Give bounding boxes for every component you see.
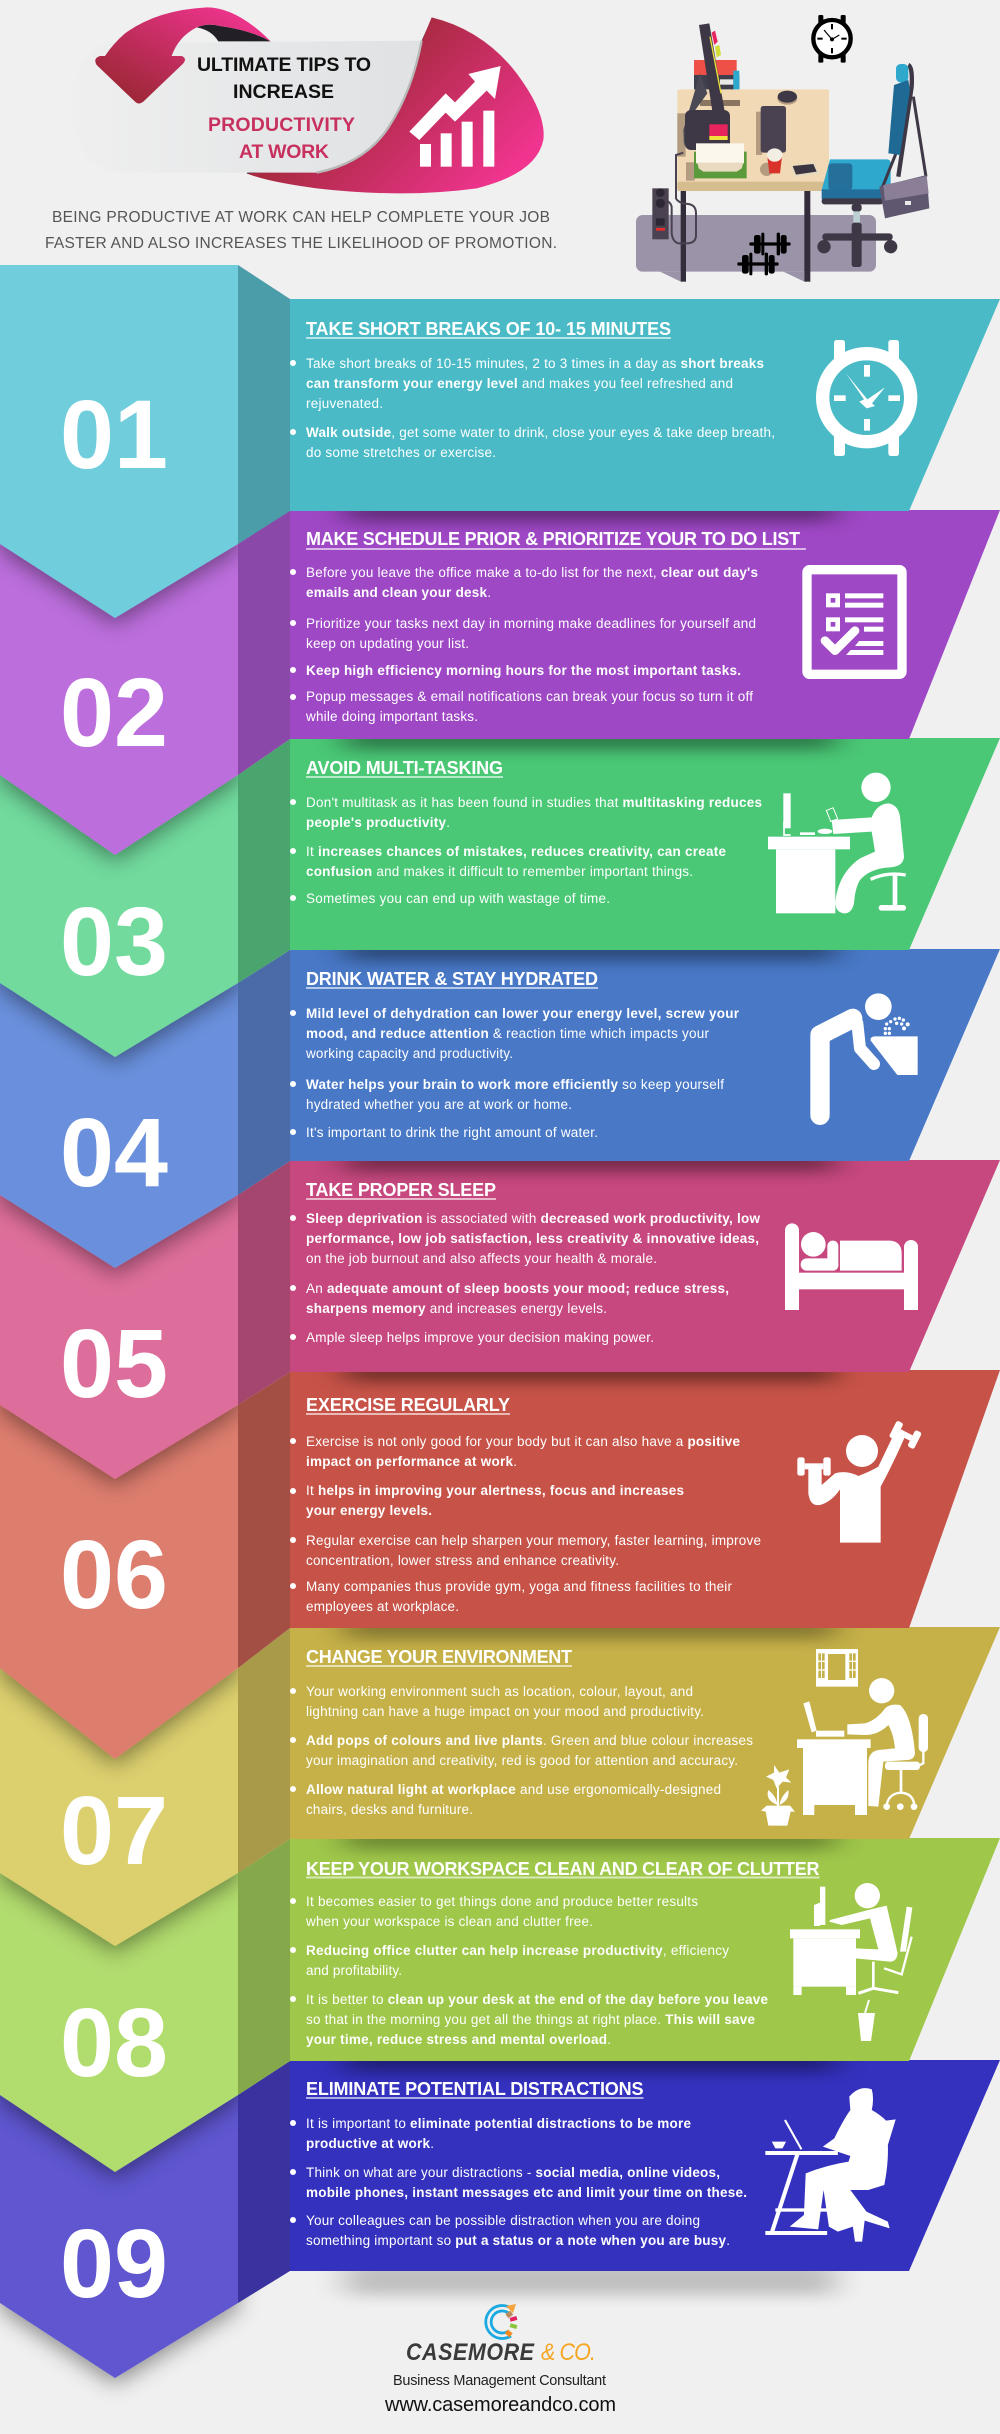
company logo and contact bbox=[384, 2304, 616, 2416]
title text: ULTIMATE TIPS TO bbox=[197, 54, 371, 76]
numbered chevrons bbox=[0, 265, 238, 2378]
text block: Take short breaks of 10-15 minutes, 2 to 3 times in a day as short breaks bbox=[306, 356, 764, 371]
text block: Don't multitask as it has been found in studies that multitasking reduces bbox=[306, 795, 762, 810]
chevron 02: 02 bbox=[60, 658, 168, 767]
text block: on the job burnout and also affects your health & morale. bbox=[306, 1251, 657, 1266]
chevron 09 bbox=[0, 2085, 238, 2378]
text block: keep on updating your list. bbox=[306, 636, 469, 651]
chevron 01: 01 bbox=[60, 380, 168, 489]
text block: hydrated whether you are at work or home. bbox=[306, 1097, 572, 1112]
icon: silhouette at desk bbox=[765, 2088, 896, 2242]
text block bbox=[290, 565, 758, 724]
heading: EXERCISE REGULARLY bbox=[306, 1395, 510, 1415]
text block: mood, and reduce attention & reaction time which impacts your bbox=[306, 1026, 710, 1041]
chevron 07 bbox=[0, 1655, 238, 1946]
company name bbox=[406, 2338, 596, 2365]
text block: An adequate amount of sleep boosts your mood; reduce stress, bbox=[306, 1281, 729, 1296]
shadow under last panel bbox=[345, 2263, 835, 2295]
panel 8: keep workspace clean bbox=[290, 1828, 1000, 2061]
icon: person at desk with window and plant bbox=[761, 1649, 928, 1826]
intro text: BEING PRODUCTIVE AT WORK CAN HELP COMPLETE YOUR JOB bbox=[52, 209, 550, 226]
panel 6: exercise regularly bbox=[290, 1360, 1000, 1628]
text block: when your workspace is clean and clutter free. bbox=[305, 1914, 593, 1929]
chevron 04 bbox=[0, 973, 238, 1268]
text block: your imagination and creativity, red is good for attention and accuracy. bbox=[306, 1753, 738, 1768]
text block: confusion and makes it difficult to remember important things. bbox=[306, 864, 693, 879]
text block: Exercise is not only good for your body but it can also have a positive bbox=[306, 1434, 740, 1449]
text block: Sometimes you can end up with wastage of time. bbox=[306, 891, 610, 906]
folded side strips bbox=[238, 265, 290, 2303]
icon: person at water fountain bbox=[820, 993, 918, 1115]
text block: mobile phones, instant messages etc and limit your time on these. bbox=[306, 2185, 747, 2200]
text block: sharpens memory and increases energy levels. bbox=[306, 1301, 607, 1316]
text block: concentration, lower stress and enhance creativity. bbox=[306, 1553, 619, 1568]
chevron 06 bbox=[0, 1395, 238, 1759]
icon: checklist bbox=[807, 570, 902, 674]
panel 7: change environment bbox=[290, 1617, 1000, 1839]
text block bbox=[290, 1894, 768, 2047]
text block bbox=[290, 2116, 747, 2248]
text block: It is important to eliminate potential distractions to be more bbox=[306, 2116, 691, 2131]
text block: Regular exercise can help sharpen your memory, faster learning, improve bbox=[306, 1533, 761, 1548]
text block bbox=[290, 356, 775, 460]
text block: Think on what are your distractions - social media, online videos, bbox=[306, 2165, 720, 2180]
heading: TAKE SHORT BREAKS OF 10- 15 MINUTES bbox=[306, 319, 671, 339]
title text bbox=[197, 54, 371, 163]
text block: while doing important tasks. bbox=[305, 709, 478, 724]
chevron 04: 04 bbox=[60, 1098, 168, 1207]
tagline: Business Management Consultant bbox=[393, 2373, 606, 2389]
title text: INCREASE bbox=[233, 81, 334, 103]
icon: person at tidy desk bbox=[790, 1883, 912, 2041]
chevron 09: 09 bbox=[60, 2209, 168, 2318]
text block bbox=[290, 1434, 761, 1614]
icon: dumbbells bbox=[737, 233, 791, 275]
intro text: FASTER AND ALSO INCREASES THE LIKELIHOOD OF PROMOTION. bbox=[45, 235, 557, 252]
logo mark bbox=[486, 2304, 517, 2338]
text block: productive at work. bbox=[306, 2136, 434, 2151]
text block: Your working environment such as location, colour, layout, and bbox=[306, 1684, 693, 1699]
chevron 05: 05 bbox=[60, 1309, 168, 1418]
panel 5: proper sleep bbox=[290, 1150, 1000, 1372]
text block: performance, low job satisfaction, less creativity & innovative ideas, bbox=[306, 1231, 759, 1246]
text block: employees at workplace. bbox=[306, 1599, 459, 1614]
text block: Add pops of colours and live plants. Green and blue colour increases bbox=[306, 1733, 753, 1748]
icon: wristwatch bbox=[823, 340, 911, 456]
text block: do some stretches or exercise. bbox=[306, 445, 496, 460]
text block: It is better to clean up your desk at the end of the day before you leave bbox=[306, 1992, 768, 2007]
text block: Ample sleep helps improve your decision making power. bbox=[306, 1330, 654, 1345]
text block: so that in the morning you get all the things at right place. This will save bbox=[306, 2012, 755, 2027]
icon: person lifting dumbbells bbox=[797, 1420, 922, 1543]
heading: AVOID MULTI-TASKING bbox=[306, 758, 503, 778]
text block: Water helps your brain to work more efficiently so keep yourself bbox=[306, 1077, 724, 1092]
text block: Walk outside, get some water to drink, close your eyes & take deep breath, bbox=[306, 425, 775, 440]
icon: growth chart bbox=[409, 66, 501, 167]
text block: Mild level of dehydration can lower your energy level, screw your bbox=[306, 1006, 740, 1021]
desk illustration bbox=[636, 15, 929, 282]
chevron 01 bbox=[0, 265, 238, 618]
text block: impact on performance at work. bbox=[306, 1454, 517, 1469]
text block: Many companies thus provide gym, yoga and fitness facilities to their bbox=[306, 1579, 732, 1594]
text block: It's important to drink the right amount of water. bbox=[306, 1125, 598, 1140]
text block: something important so put a status or a note when you are busy. bbox=[306, 2233, 730, 2248]
chevron 08 bbox=[0, 1860, 238, 2172]
text block: your time, reduce stress and mental overload. bbox=[306, 2032, 611, 2047]
heading: MAKE SCHEDULE PRIOR & PRIORITIZE YOUR TO DO LIST bbox=[306, 529, 800, 549]
chevron 03: 03 bbox=[60, 887, 168, 996]
text block: Your colleagues can be possible distraction when you are doing bbox=[306, 2213, 700, 2228]
panel 9: eliminate distractions bbox=[290, 2050, 1000, 2271]
panel 1: short breaks bbox=[290, 299, 1000, 511]
text block: Keep high efficiency morning hours for the most important tasks. bbox=[306, 663, 741, 678]
title text: AT WORK bbox=[239, 141, 329, 163]
panel 2: schedule and to-do list bbox=[290, 500, 1000, 739]
text block: rejuvenated. bbox=[306, 396, 383, 411]
text block bbox=[290, 795, 762, 906]
chevron 05 bbox=[0, 1185, 238, 1479]
text block bbox=[290, 1006, 740, 1140]
text block: can transform your energy level and makes you feel refreshed and bbox=[306, 376, 733, 391]
title text: PRODUCTIVITY bbox=[208, 114, 355, 136]
text block: and profitability. bbox=[306, 1963, 402, 1978]
text block: lightning can have a huge impact on your mood and productivity. bbox=[306, 1704, 704, 1719]
panel 4: drink water bbox=[290, 939, 1000, 1161]
text block: It increases chances of mistakes, reduces creativity, can create bbox=[306, 844, 726, 859]
company name: & CO. bbox=[541, 2338, 596, 2365]
text block: Sleep deprivation is associated with decreased work productivity, low bbox=[306, 1211, 760, 1226]
text block bbox=[290, 1684, 753, 1817]
heading: KEEP YOUR WORKSPACE CLEAN AND CLEAR OF CLUTTER bbox=[306, 1859, 820, 1879]
text block: Reducing office clutter can help increase productivity, efficiency bbox=[306, 1943, 729, 1958]
panel 3: avoid multi-tasking bbox=[290, 728, 1000, 950]
text block: people's productivity. bbox=[306, 815, 450, 830]
heading: ELIMINATE POTENTIAL DISTRACTIONS bbox=[306, 2079, 644, 2099]
heading: CHANGE YOUR ENVIRONMENT bbox=[306, 1647, 572, 1667]
text block: It helps in improving your alertness, focus and increases bbox=[306, 1483, 684, 1498]
text block bbox=[290, 1211, 760, 1345]
chevron 07: 07 bbox=[60, 1776, 168, 1885]
icon: person in bed bbox=[785, 1223, 918, 1310]
icon: black watch bbox=[813, 15, 851, 63]
title banner bbox=[72, 7, 544, 193]
chevron 02 bbox=[0, 534, 238, 855]
chevron 03 bbox=[0, 765, 238, 1057]
heading: DRINK WATER & STAY HYDRATED bbox=[306, 969, 598, 989]
heading: TAKE PROPER SLEEP bbox=[306, 1180, 496, 1200]
text block: Allow natural light at workplace and use ergonomically-designed bbox=[306, 1782, 721, 1797]
text block: chairs, desks and furniture. bbox=[306, 1802, 473, 1817]
text block: working capacity and productivity. bbox=[305, 1046, 513, 1061]
text block: emails and clean your desk. bbox=[306, 585, 491, 600]
text block: your energy levels. bbox=[306, 1503, 432, 1518]
company name: CASEMORE bbox=[406, 2338, 535, 2365]
chevron 06: 06 bbox=[60, 1520, 168, 1629]
icon: person at desk with phone bbox=[768, 773, 906, 913]
icon: waste cup bbox=[858, 2000, 875, 2041]
website: www.casemoreandco.com bbox=[384, 2394, 616, 2416]
chevron 08: 08 bbox=[60, 1988, 168, 2097]
text block: Prioritize your tasks next day in morning make deadlines for yourself and bbox=[306, 616, 756, 631]
intro text bbox=[45, 209, 557, 252]
text block: It becomes easier to get things done and produce better results bbox=[306, 1894, 698, 1909]
text block: Popup messages & email notifications can break your focus so turn it off bbox=[306, 689, 753, 704]
text block: Before you leave the office make a to-do list for the next, clear out day's bbox=[306, 565, 758, 580]
